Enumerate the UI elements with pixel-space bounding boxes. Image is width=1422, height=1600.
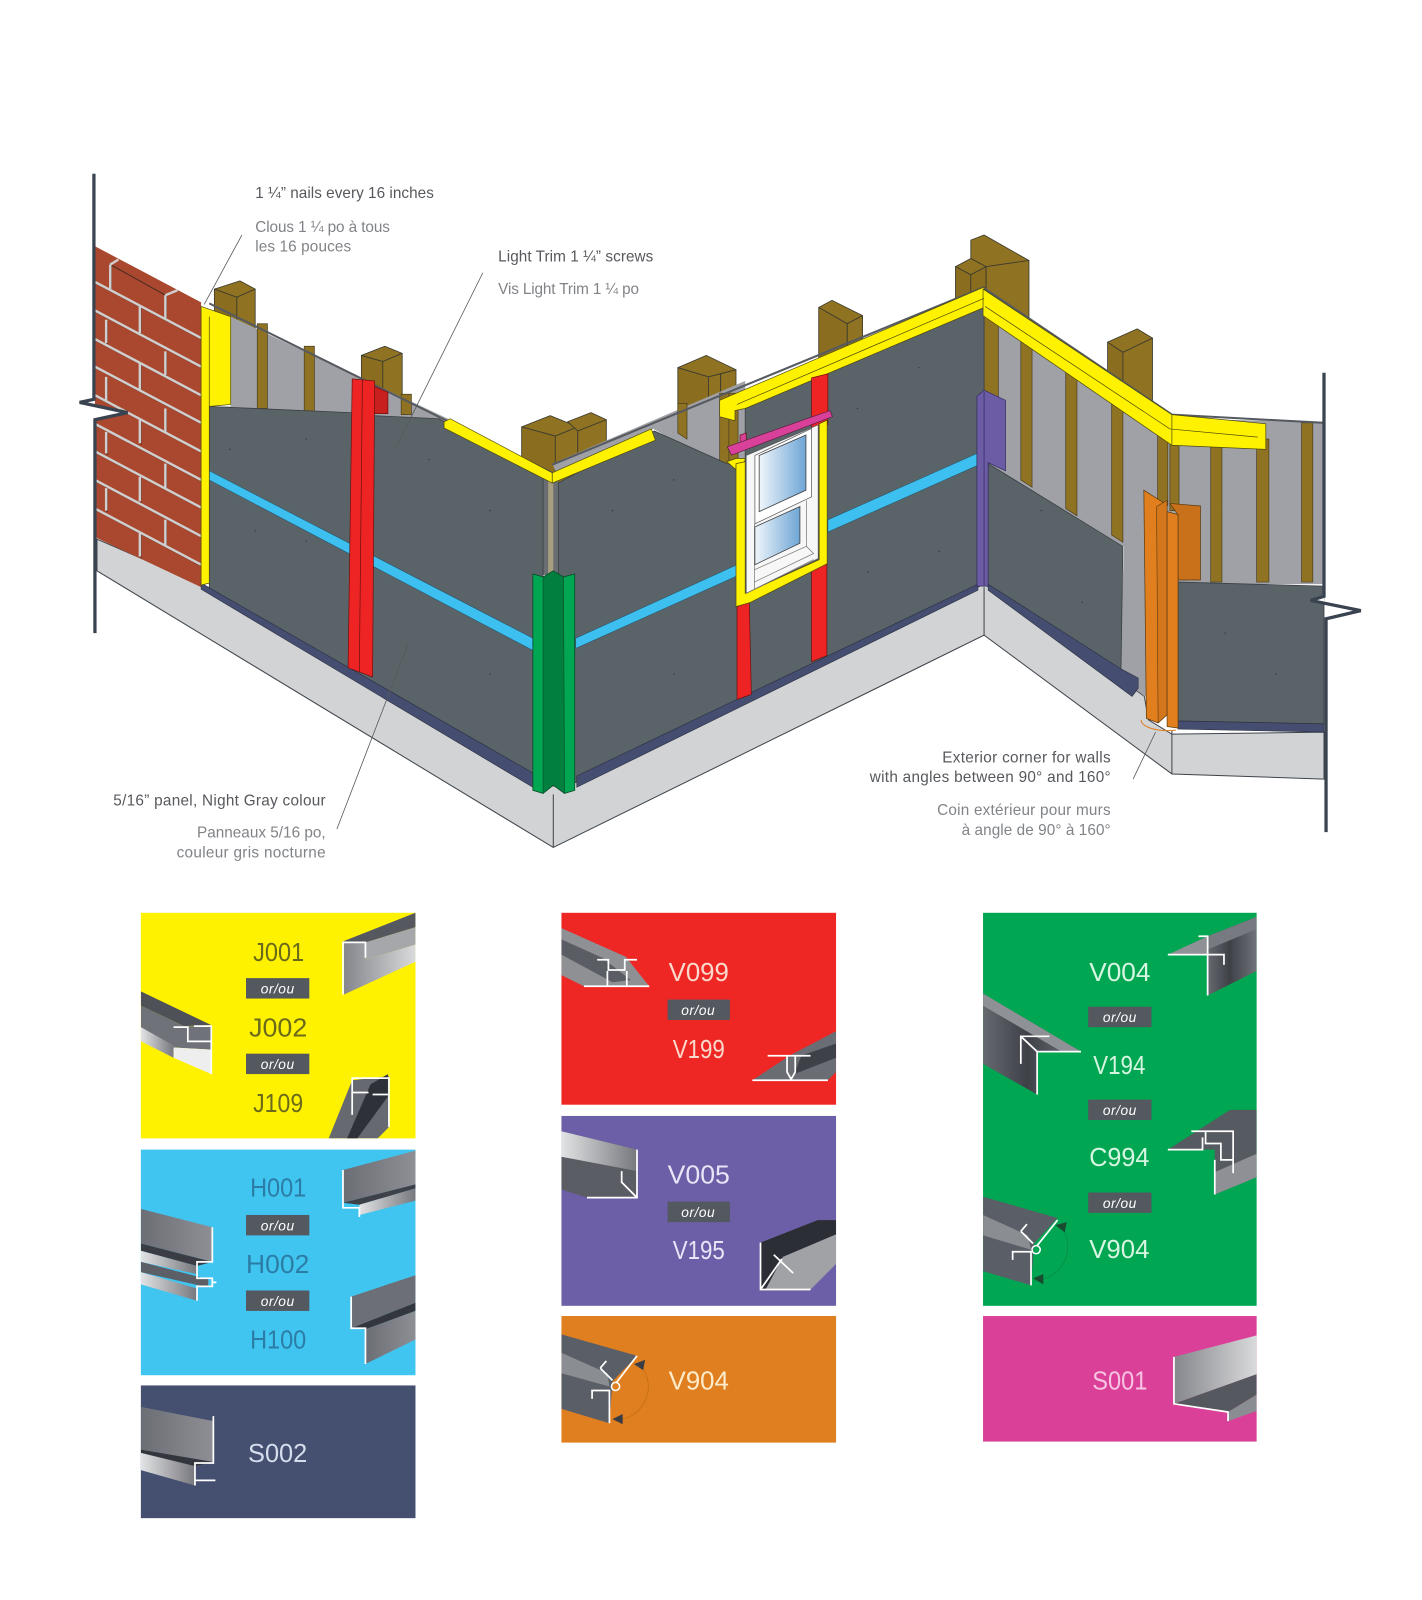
badge: or/ou [246, 978, 309, 999]
label: V004: V004 [1089, 959, 1150, 987]
wood posts [214, 235, 1153, 485]
red vertical joints [348, 374, 828, 699]
label: V005: V005 [668, 1161, 730, 1189]
panel: centre wall [558, 301, 984, 788]
icon: V195 profile [761, 1220, 836, 1289]
label: H100: H100 [250, 1327, 306, 1355]
corner gap between walls [542, 475, 558, 575]
callout: panel: 5/16” panel, Night Gray colour [113, 793, 326, 810]
callout: exterior corner [869, 750, 1111, 839]
callout: nails: les 16 pouces [255, 238, 352, 255]
label: C994: C994 [1089, 1144, 1149, 1172]
icon: H100 profile [351, 1275, 415, 1364]
icon: J002 profile [141, 991, 211, 1074]
icon: V194 profile [983, 993, 1081, 1095]
badge: or/ou [246, 1054, 309, 1074]
panel: purple V trims [561, 1116, 836, 1306]
icon: S002 profile [141, 1407, 215, 1485]
icon: V004 profile [1168, 917, 1257, 995]
cyan H trims [209, 453, 977, 650]
callout: panel: couleur gris nocturne [177, 845, 326, 862]
icon: S001 profile [1174, 1335, 1257, 1421]
label: J001: J001 [253, 939, 304, 967]
icon: V904 profile [983, 1197, 1068, 1285]
icon: J001 profile [343, 913, 415, 994]
window [727, 411, 832, 607]
callout: nails [255, 185, 434, 255]
callout: exterior corner: à angle de 90° à 160° [962, 822, 1111, 839]
icon: V099 profile [561, 928, 649, 986]
break lines [80, 174, 1361, 832]
wall diagram [80, 174, 1361, 862]
callout: screws [498, 249, 654, 298]
badge: or/ou: or/ou [1103, 1010, 1137, 1025]
label: V194: V194 [1093, 1052, 1145, 1080]
callout: panel: Panneaux 5/16 po, [197, 824, 326, 841]
panel: far right wall [1178, 582, 1324, 724]
label: V099: V099 [669, 959, 729, 987]
callout: exterior corner: Coin extérieur pour murs [937, 802, 1111, 819]
callout: nails: 1 ¼” nails every 16 inches [255, 185, 434, 202]
callout: screws: Light Trim 1 ¼” screws [498, 249, 654, 266]
badge: or/ou [246, 1215, 309, 1235]
icon: J109 profile [329, 1074, 389, 1138]
panel: orange V904 [561, 1316, 836, 1443]
label: J109: J109 [253, 1090, 303, 1118]
callout: nails: Clous 1 ¼ po à tous [255, 219, 390, 236]
purple corner trim [977, 390, 1006, 586]
badge: or/ou [246, 1291, 309, 1311]
panel: yellow J trims [141, 913, 415, 1138]
brick wall [95, 246, 202, 587]
leader lines [204, 235, 1156, 829]
panel fastener dots [230, 368, 1276, 674]
sheathing and studs [209, 287, 1324, 705]
badge: or/ou: or/ou [681, 1205, 715, 1220]
badge: or/ou: or/ou [261, 1057, 295, 1072]
badge: or/ou: or/ou [261, 1294, 295, 1309]
label: H002: H002 [246, 1251, 309, 1279]
badge: or/ou [1088, 1007, 1151, 1027]
icon: H001 profile [343, 1151, 415, 1217]
label: V195: V195 [673, 1237, 725, 1265]
green exterior corner [533, 571, 575, 793]
badge: or/ou [1088, 1193, 1151, 1213]
label: S001: S001 [1092, 1368, 1147, 1396]
panel: left wall [209, 406, 543, 786]
label: S002: S002 [248, 1440, 307, 1468]
badge: or/ou [668, 1000, 730, 1020]
icon: C994 profile [1168, 1110, 1257, 1195]
icon: H002 profile [141, 1209, 216, 1301]
fibre cement panels, Night Gray [209, 301, 1324, 788]
panel: blue H trims [141, 1150, 415, 1375]
yellow J trims left and top [201, 287, 1266, 585]
panel: red V trims [561, 913, 836, 1105]
callout: screws: Vis Light Trim 1 ¼ po [498, 281, 639, 298]
navy starter strips [201, 583, 1324, 787]
badge: or/ou: or/ou [261, 981, 295, 996]
badge: or/ou: or/ou [261, 1218, 295, 1233]
icon: V199 profile [752, 1031, 836, 1080]
badge: or/ou [1088, 1100, 1151, 1120]
badge: or/ou [668, 1202, 730, 1222]
panel: green V trims [983, 913, 1257, 1306]
label: H001: H001 [250, 1175, 306, 1203]
badge: or/ou: or/ou [681, 1003, 715, 1018]
label: V904: V904 [669, 1368, 729, 1396]
panel: navy S002 [141, 1385, 415, 1518]
label: J002: J002 [249, 1014, 307, 1042]
label: V199: V199 [673, 1036, 725, 1064]
icon: V904 profile [561, 1334, 648, 1424]
icon: V005 profile [561, 1131, 637, 1198]
callout: exterior corner: with angles between 90° and 160° [869, 769, 1111, 786]
orange exterior corner [1141, 490, 1200, 731]
concrete foundation [97, 539, 1324, 847]
panel: right wall [988, 464, 1123, 676]
label: V904: V904 [1089, 1236, 1149, 1264]
callout: exterior corner: Exterior corner for walls [942, 750, 1111, 767]
badge: or/ou: or/ou [1103, 1196, 1137, 1211]
panel: pink S001 [983, 1316, 1257, 1442]
badge: or/ou: or/ou [1103, 1103, 1137, 1118]
callout: panel [113, 793, 326, 862]
